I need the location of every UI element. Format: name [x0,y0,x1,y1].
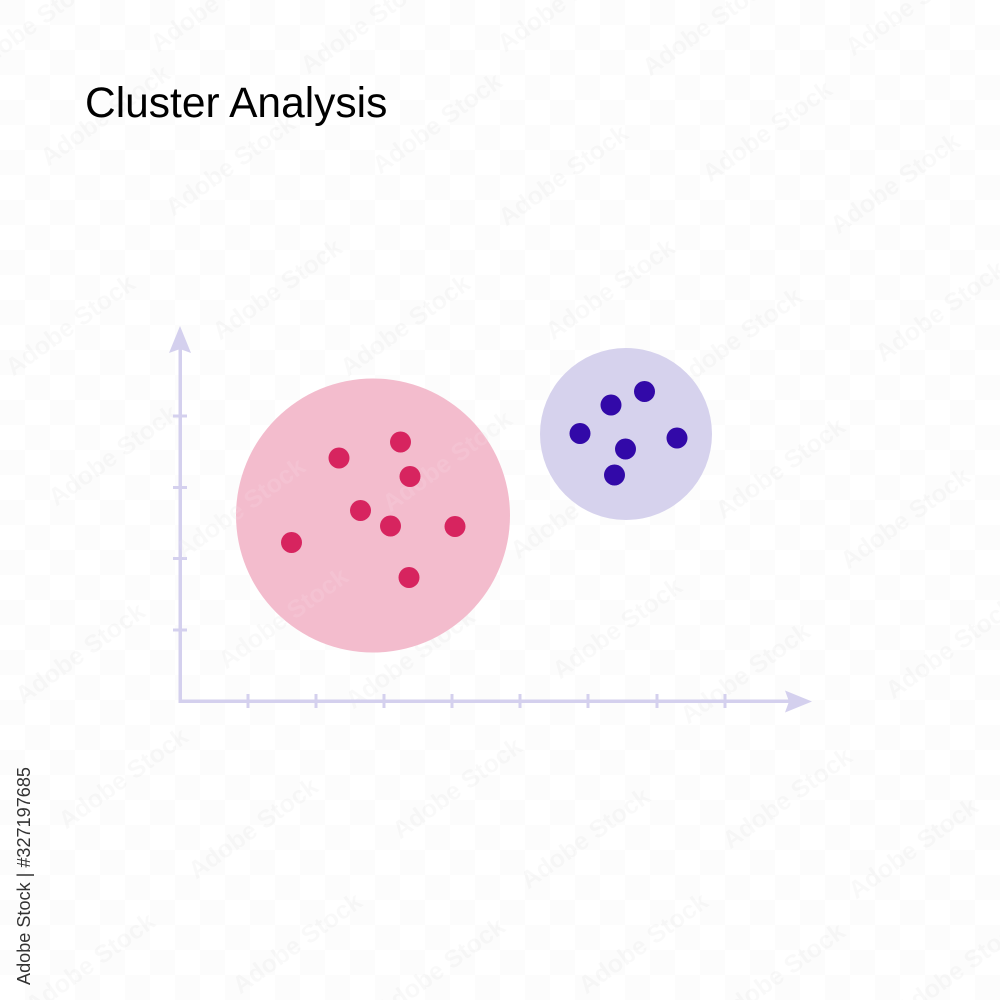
watermark pattern: Adobe Stock [367,67,507,180]
watermark pattern: Adobe Stock [227,887,367,1000]
watermark pattern: Adobe Stock [493,119,633,232]
cluster: pink: Adobe Stock [213,562,353,675]
watermark pattern: Adobe Stock [0,269,140,382]
watermark pattern: Adobe Stock [35,59,175,172]
watermark pattern: Adobe Stock [340,602,480,715]
watermark pattern: Adobe Stock [387,732,527,845]
watermark pattern: Adobe Stock [10,597,150,710]
watermark pattern: Adobe Stock [515,782,655,895]
watermark pattern: Adobe Stock [540,233,680,346]
watermark pattern: Adobe Stock [667,282,807,395]
cluster: pink [170,378,517,675]
y axis with arrow and ticks [169,326,191,703]
watermark pattern: Adobe Stock [183,772,323,885]
watermark pattern: Adobe Stock [843,792,983,905]
watermark pattern: Adobe Stock [207,233,347,346]
cluster: pink: Adobe Stock [170,452,310,565]
watermark pattern: Adobe Stock [717,742,857,855]
watermark pattern: Adobe Stock [835,462,975,575]
cluster: purple [540,348,712,520]
watermark pattern: Adobe Stock [335,269,475,382]
watermark pattern: Adobe Stock [697,75,837,188]
watermark pattern: Adobe Stock [675,617,815,730]
scatter chart [169,326,812,712]
watermark pattern: Adobe Stock [213,562,353,675]
title: Cluster Analysis [85,80,387,127]
watermark pattern: Adobe Stock [710,412,850,525]
cluster: pink: Adobe Stock [377,405,517,518]
watermark pattern: Adobe Stock [547,572,687,685]
stock id text: Adobe Stock | #327197685 [14,767,34,985]
watermark pattern: Adobe Stock [53,722,193,835]
watermark pattern: Adobe Stock [43,399,183,512]
x axis with arrow and ticks [178,690,812,712]
watermark pattern: Adobe Stock [573,887,713,1000]
watermark pattern: Adobe Stock [170,452,310,565]
watermark pattern: Adobe Stock [377,405,517,518]
watermark pattern: Adobe Stock [505,452,645,565]
watermark pattern: Adobe Stock [160,109,300,222]
watermark pattern: Adobe Stock [825,127,965,240]
